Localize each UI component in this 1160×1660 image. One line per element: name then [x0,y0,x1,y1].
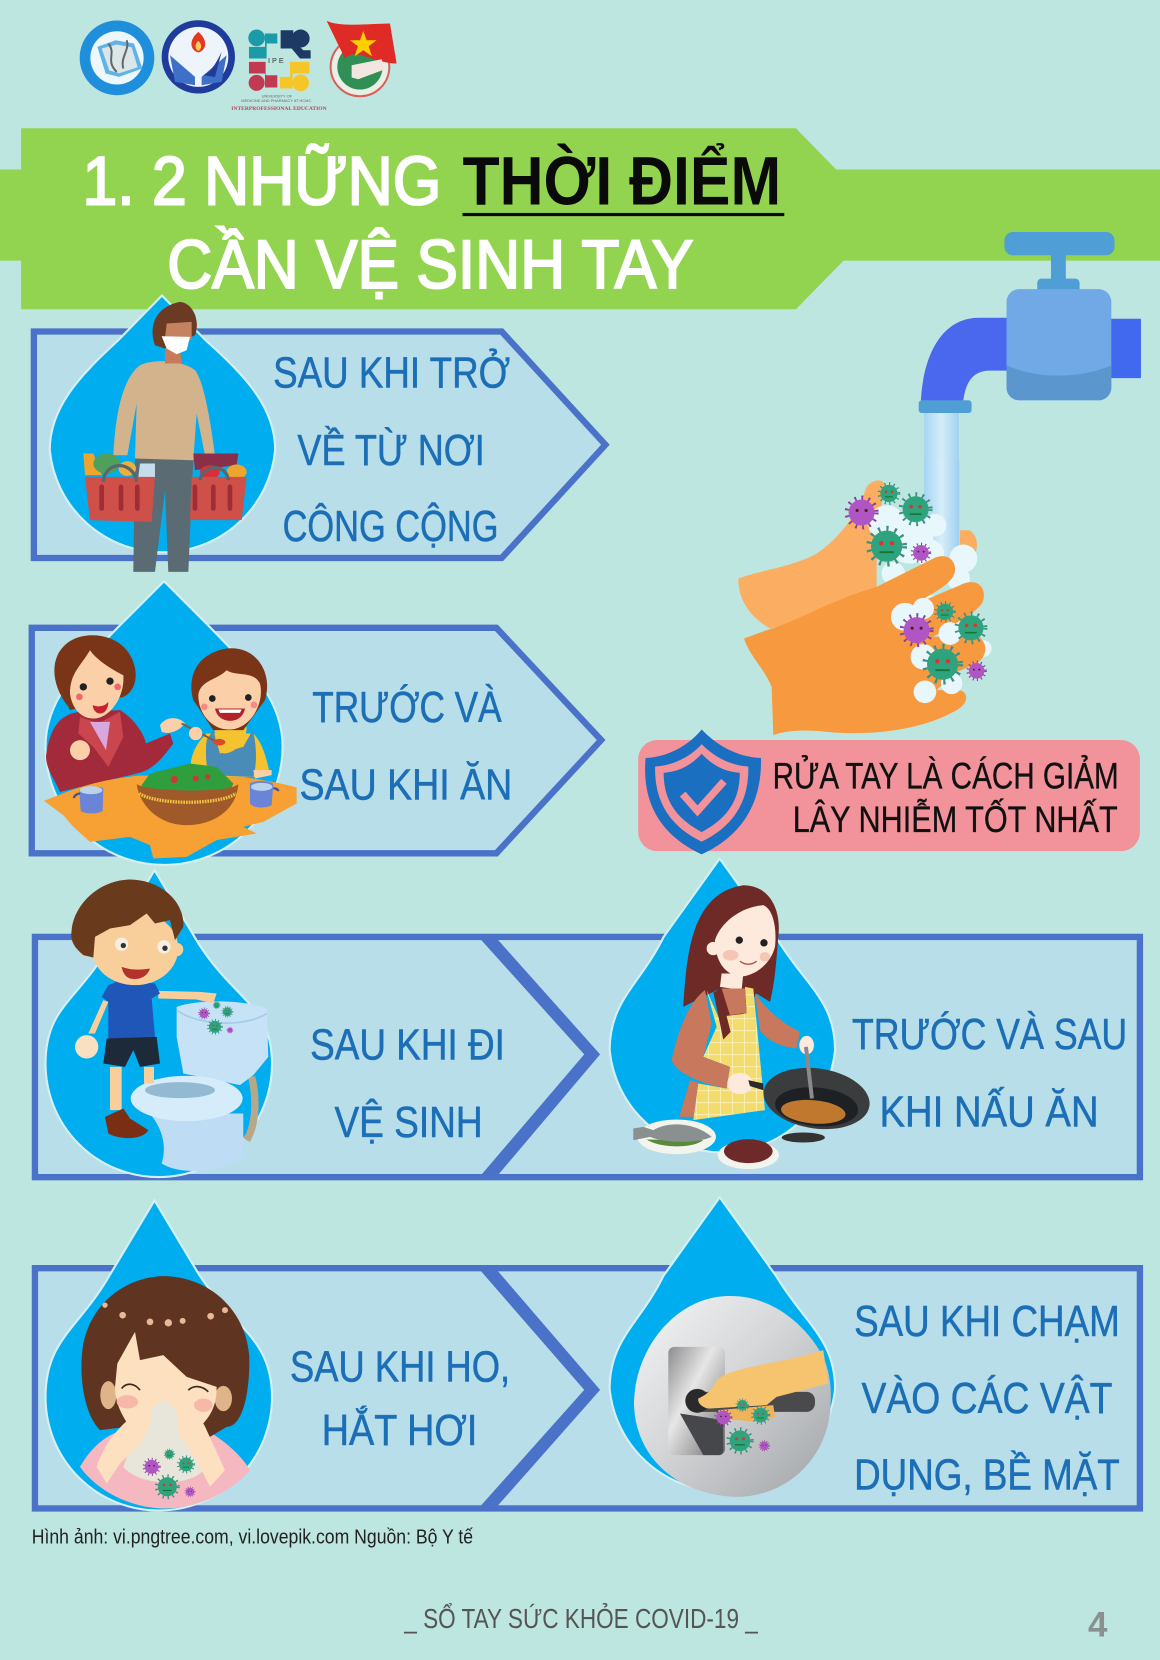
title line 1: 1. 2 NHỮNG [83,142,441,219]
panel: before and after eating [32,581,601,865]
panel shape [35,1268,1140,1508]
illustration: mother and child eating [44,635,297,858]
washing hands [738,460,992,735]
label line 2: VỀ TỪ NƠI [297,427,485,475]
logo: faculty of nursing [162,20,235,94]
chevron divider [478,1268,600,1508]
title line 2: CẦN VỆ SINH TAY [167,226,693,303]
panel: toilet and cooking row [35,859,1140,1178]
illustration: door handle [634,1296,831,1497]
label: sneeze line 2: HẮT HƠI [322,1406,477,1455]
logos row [80,20,397,112]
label: sneeze line 1: SAU KHI HO, [290,1343,510,1391]
logo: IPE: IPE [268,56,286,65]
panel: sneeze and touch row [35,1197,1140,1511]
logo: IPE: MEDICINE AND PHARMACY AT HCMC [241,98,311,103]
drop [50,296,275,552]
panel: after returning from public places [34,296,605,572]
panel shape [34,331,605,558]
callout: handwashing [638,729,1140,854]
illustration: boy at toilet [71,880,268,1171]
illustration: girl sneezing [80,1276,250,1508]
label: touch line 2: VÀO CÁC VẬT [862,1375,1112,1423]
page number: 4 [1088,1605,1108,1644]
banner shape [0,128,1160,309]
logo: IPE: INTERPROFESSIONAL EDUCATION [231,107,327,112]
drop: cooking [610,859,835,1152]
drop: sneeze [46,1200,272,1511]
drop: touch [610,1197,835,1491]
label: after toilet line 2: VỆ SINH [334,1099,483,1147]
title banner [0,128,1160,309]
panel shape [32,628,601,853]
drop [46,581,283,865]
label line 3: CÔNG CỘNG [283,503,499,551]
label line 1: SAU KHI TRỞ [273,349,510,398]
source credit: Hình ảnh: vi.pngtree.com, vi.lovepik.com Nguồn: Bộ Y tế [32,1526,473,1548]
label: cooking line 2: KHI NẤU ĂN [880,1088,1099,1136]
logo: university of medicine and pharmacy [80,21,154,95]
footer handbook title: _ SỔ TAY SỨC KHỎE COVID-19 _ [403,1602,758,1634]
label: touch line 1: SAU KHI CHẠM [854,1298,1120,1346]
label line 2: SAU KHI ĂN [300,761,512,809]
drop: toilet [46,870,272,1177]
title emphasis: THỜI ĐIỂM [463,142,781,219]
illustration: man with baskets [83,302,247,572]
icon: shield check [645,729,761,854]
label line 1: TRƯỚC VÀ [312,684,502,732]
water stream [924,413,959,551]
illustration: woman cooking [633,885,874,1169]
logo: IPE: UNIVERSITY OF [262,94,293,99]
chevron divider [478,937,600,1178]
label: after toilet line 1: SAU KHI ĐI [310,1022,505,1070]
faucet [919,232,1141,413]
panel shape [35,937,1140,1177]
logo: youth union flag [327,21,397,96]
logo: IPE [231,30,327,112]
label: touch line 3: DỤNG, BỀ MẶT [854,1451,1120,1499]
